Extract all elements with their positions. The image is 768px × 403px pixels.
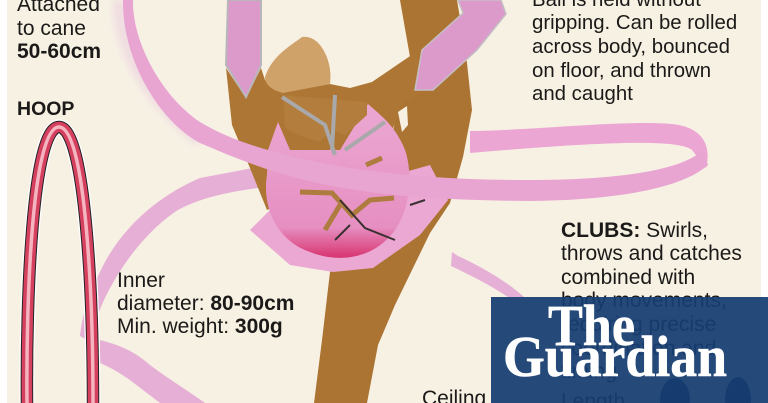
logo wordmark: Guardian <box>503 324 727 389</box>
label: hoop dimensions: diameter: 80-90cm <box>117 292 294 315</box>
label: ribbon <box>17 0 101 63</box>
ribbon: main sweep across body <box>123 0 708 201</box>
logo wordmark <box>503 293 727 389</box>
text: clubs: timing <box>561 360 617 383</box>
text: clubs: CLUBS: Swirls, <box>561 219 708 242</box>
gymnast legs <box>314 0 472 403</box>
label: ribbon: to cane <box>17 17 86 40</box>
The Guardian logo panel <box>491 293 768 403</box>
logo wordmark: The <box>548 293 635 358</box>
ribbon: rear and lower sections <box>80 123 708 403</box>
text: clubs: coordination and <box>561 337 716 360</box>
icon: clubs <box>660 377 751 403</box>
cream gap under arm <box>398 106 408 132</box>
text: clubs: throws and catches <box>561 242 742 265</box>
gymnast arm and shoulders <box>226 52 424 210</box>
text: ball: on floor, and thrown <box>532 60 711 82</box>
text: ball: gripping. Can be rolled <box>532 12 737 34</box>
label: ribbon: 50-60cm <box>17 40 101 63</box>
gymnast head <box>265 37 331 93</box>
label: hoop dimensions <box>117 269 294 338</box>
text: ball <box>532 0 737 105</box>
label: hoop dimensions: Min. weight: 300g <box>117 315 283 338</box>
icon: hoop <box>27 127 93 403</box>
text: ball: across body, bounced <box>532 36 730 58</box>
text: ball: and caught <box>532 83 633 105</box>
right glove <box>415 0 506 90</box>
ribbon: long upper sweep shadow <box>120 0 200 140</box>
text: clubs: combined with <box>561 266 695 289</box>
text: clubs <box>561 219 742 403</box>
text: clubs: requiring precise <box>561 313 716 336</box>
label: hoop dimensions: Inner <box>117 269 165 292</box>
left glove <box>226 0 261 97</box>
text: clubs: body movements, <box>561 289 727 312</box>
leotard and skirt <box>250 95 448 272</box>
heading: hoop: HOOP <box>17 98 74 120</box>
